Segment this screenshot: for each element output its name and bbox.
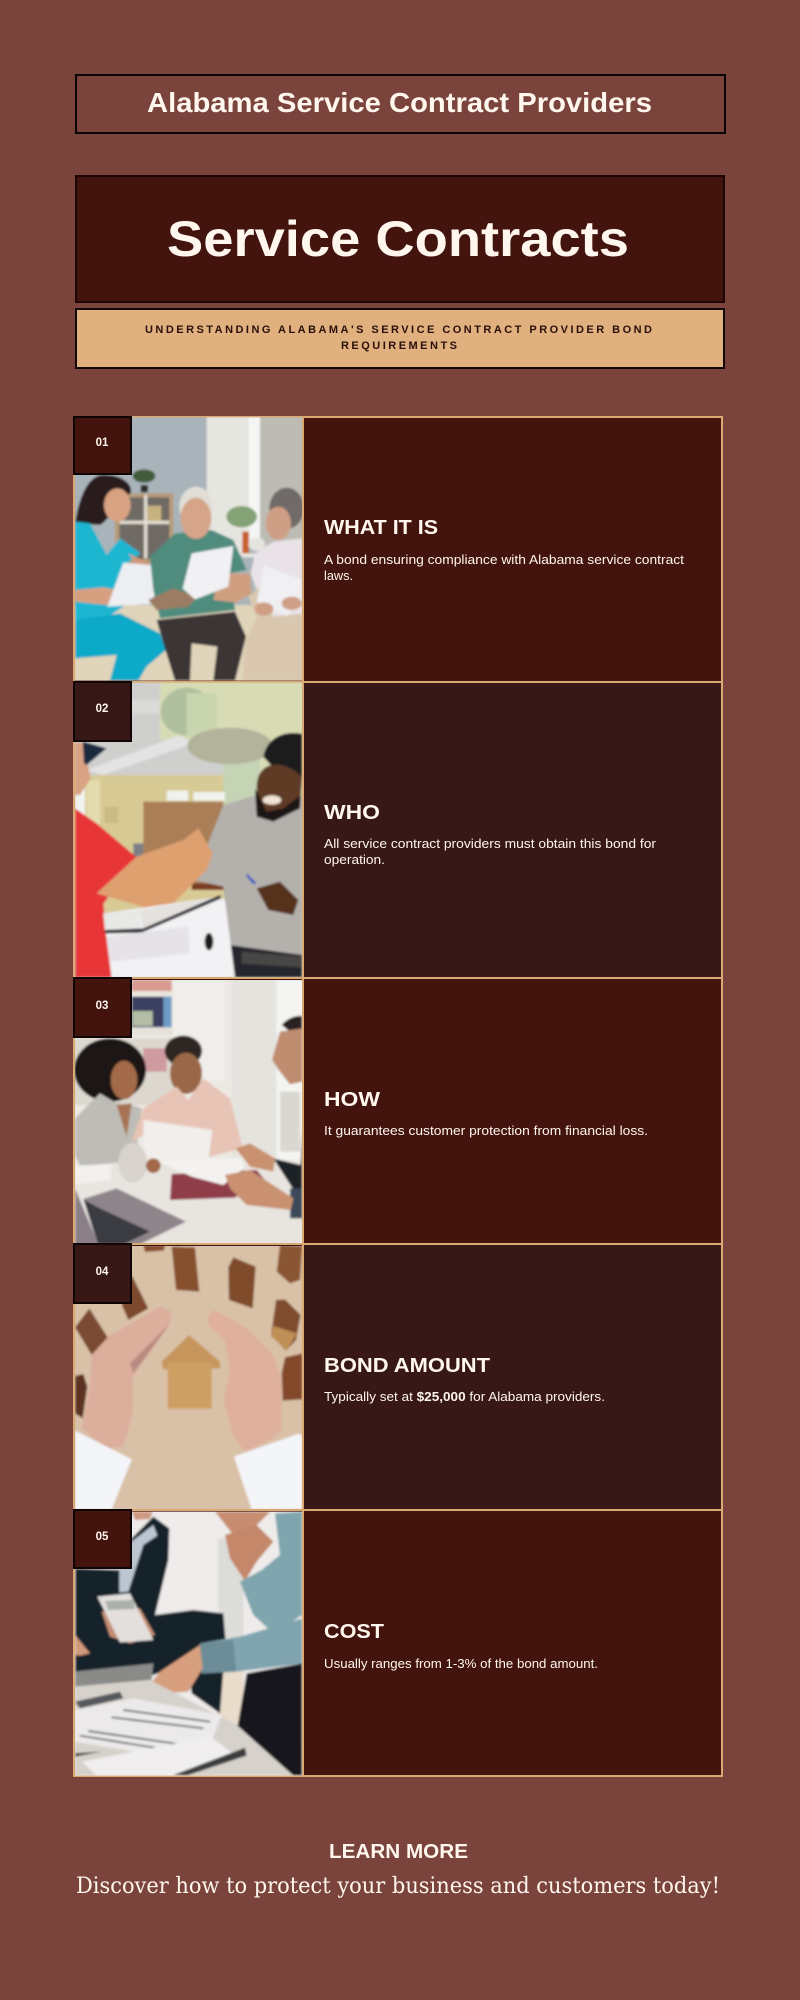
man xyxy=(165,1036,202,1066)
row 2 panel xyxy=(74,682,722,978)
body text: Usually ranges from 1-3% of the bond amount. xyxy=(324,1657,598,1671)
body text xyxy=(324,837,656,867)
row 5: cost xyxy=(73,1508,722,1778)
top banner: Alabama Service Contract Providers xyxy=(76,75,725,133)
left hand xyxy=(82,1307,172,1448)
subtitle panel xyxy=(76,309,724,368)
body text: operation. xyxy=(324,853,385,867)
heading: HOW xyxy=(324,1089,380,1111)
photo: couple reviewing document with advisor xyxy=(73,978,307,1250)
body text: All service contract providers must obtain this bond for xyxy=(324,837,656,851)
number tile 02: 02 xyxy=(96,703,108,715)
right hand xyxy=(208,1310,282,1452)
subtitle panel: REQUIREMENTS xyxy=(341,340,457,352)
photo divider xyxy=(302,417,304,682)
laptop xyxy=(75,1188,98,1244)
right person xyxy=(215,1512,271,1535)
hero title panel: Service Contracts xyxy=(76,176,724,302)
photo: calculator and insurance paperwork xyxy=(73,1508,307,1778)
number tile 03: 03 xyxy=(96,1000,108,1012)
photo: hands protecting a wooden house xyxy=(73,1243,307,1513)
paper, folder, hands xyxy=(170,1170,264,1200)
body text xyxy=(324,553,685,583)
row 3 panel xyxy=(74,978,722,1244)
table xyxy=(73,1163,307,1250)
body text: A bond ensuring compliance with Alabama service contract xyxy=(324,553,685,567)
photo divider xyxy=(302,682,304,978)
number tile 02 xyxy=(74,682,131,741)
left man xyxy=(75,808,136,978)
number tile 04 xyxy=(74,1244,131,1303)
photo divider xyxy=(302,1510,304,1776)
row 2: who xyxy=(73,680,722,980)
woman xyxy=(269,488,304,529)
box and clipboard xyxy=(103,897,235,978)
house xyxy=(162,1335,220,1369)
subtitle panel: UNDERSTANDING ALABAMA'S SERVICE CONTRACT PROVIDER BOND xyxy=(145,324,652,336)
heading: WHAT IT IS xyxy=(324,517,438,539)
row 3: how xyxy=(73,978,722,1250)
top banner: Alabama Service Contract Providers: Alabama Service Contract Providers xyxy=(147,87,652,118)
left person xyxy=(75,1517,226,1713)
right man xyxy=(193,795,302,957)
old man xyxy=(150,530,247,618)
row 4 panel xyxy=(74,1244,722,1510)
heading: COST xyxy=(324,1621,384,1643)
table and papers xyxy=(75,1680,293,1776)
photo: nurse reviewing papers with seniors xyxy=(73,415,307,685)
number tile 01: 01 xyxy=(96,437,109,449)
nurse xyxy=(75,475,131,525)
call to action: learn more: LEARN MORE xyxy=(329,1841,468,1863)
number tile 03 xyxy=(74,978,131,1037)
woman left xyxy=(74,1038,146,1102)
body text: laws. xyxy=(324,569,353,583)
cuffs xyxy=(75,1431,132,1509)
number tile 04: 04 xyxy=(96,1266,109,1278)
heading: BOND AMOUNT xyxy=(324,1355,490,1377)
row 4: bond amount xyxy=(73,1243,722,1513)
row 5 panel xyxy=(74,1510,722,1776)
photo: handshake over a delivery box xyxy=(73,680,307,980)
number tile 05 xyxy=(74,1510,131,1568)
row 1: what it is xyxy=(73,415,722,685)
photo divider xyxy=(302,978,304,1244)
number tile 05: 05 xyxy=(96,1531,109,1543)
hero title panel: Service Contracts: Service Contracts xyxy=(167,211,629,267)
photo divider xyxy=(302,1244,304,1510)
row 1 panel xyxy=(74,417,722,682)
number tile 01 xyxy=(74,417,131,474)
closing line: Discover how to protect your business and customers today! xyxy=(76,1874,720,1899)
body text: Typically set at $25,000 for Alabama providers. xyxy=(324,1390,605,1404)
body text: It guarantees customer protection from financial loss. xyxy=(324,1124,648,1138)
woman right xyxy=(280,1014,302,1032)
heading: WHO xyxy=(324,802,380,824)
